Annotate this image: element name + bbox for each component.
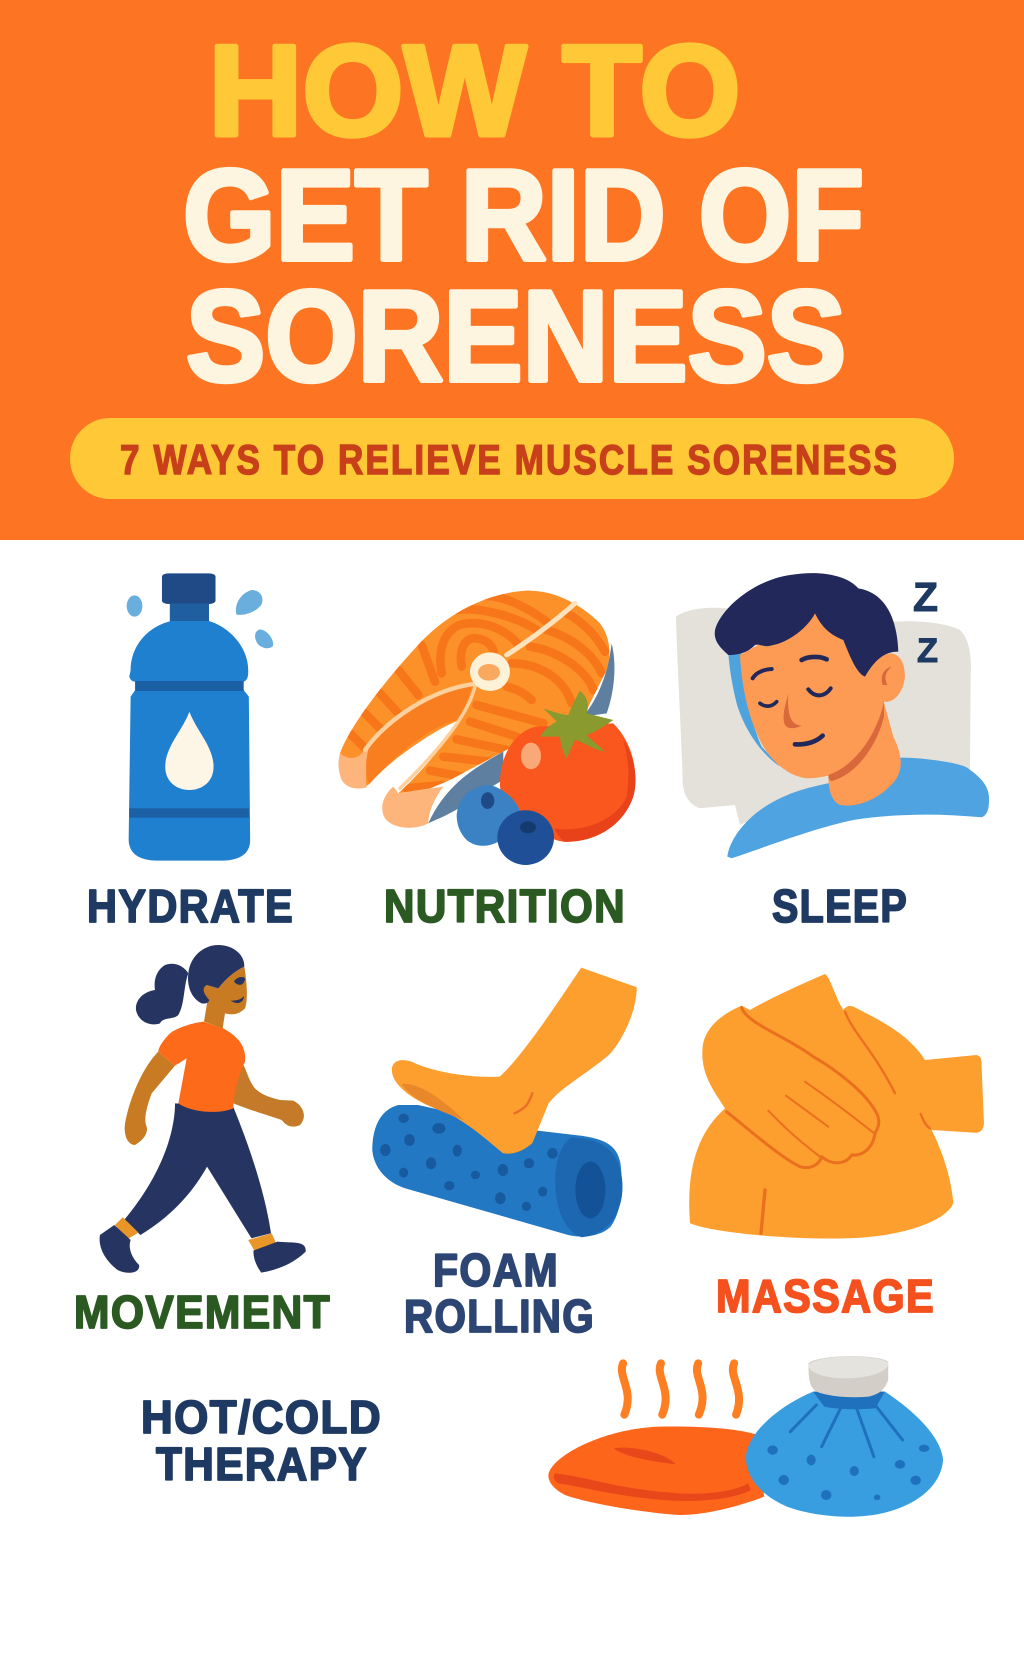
label: massage: MASSAGE bbox=[716, 1270, 935, 1322]
icon: salmon, tomato and blueberries bbox=[338, 591, 636, 865]
icon: water bottle bbox=[127, 573, 273, 861]
sleep Z letters: Z bbox=[913, 574, 938, 620]
icon: walking woman bbox=[100, 945, 306, 1273]
label: foam rolling: FOAM bbox=[433, 1244, 559, 1296]
label: foam rolling: ROLLING bbox=[404, 1290, 595, 1342]
icon: hot pad and ice bag bbox=[548, 1356, 943, 1517]
label: foam rolling bbox=[404, 1244, 595, 1342]
title line: HOW TO: HOW TO bbox=[208, 19, 740, 163]
label: hot/cold therapy: THERAPY bbox=[156, 1438, 368, 1490]
label: hot/cold therapy: HOT/COLD bbox=[141, 1391, 382, 1443]
label: sleep: SLEEP bbox=[772, 880, 908, 932]
subtitle pill bbox=[70, 418, 954, 499]
title line: SORENESS: SORENESS bbox=[186, 264, 846, 408]
sleep Z letters bbox=[913, 574, 938, 670]
label: nutrition: NUTRITION bbox=[384, 880, 626, 932]
sleep Z letters: Z bbox=[917, 632, 938, 670]
icon: foot on foam roller bbox=[372, 968, 637, 1237]
label: hot/cold therapy bbox=[141, 1391, 382, 1490]
icon: sleeping person bbox=[676, 573, 989, 858]
label: movement: MOVEMENT bbox=[74, 1286, 331, 1338]
label: hydrate: HYDRATE bbox=[87, 880, 294, 932]
icon: massage hands on back bbox=[689, 974, 984, 1239]
header banner bbox=[0, 0, 1024, 540]
title line: GET RID OF: GET RID OF bbox=[183, 144, 864, 288]
